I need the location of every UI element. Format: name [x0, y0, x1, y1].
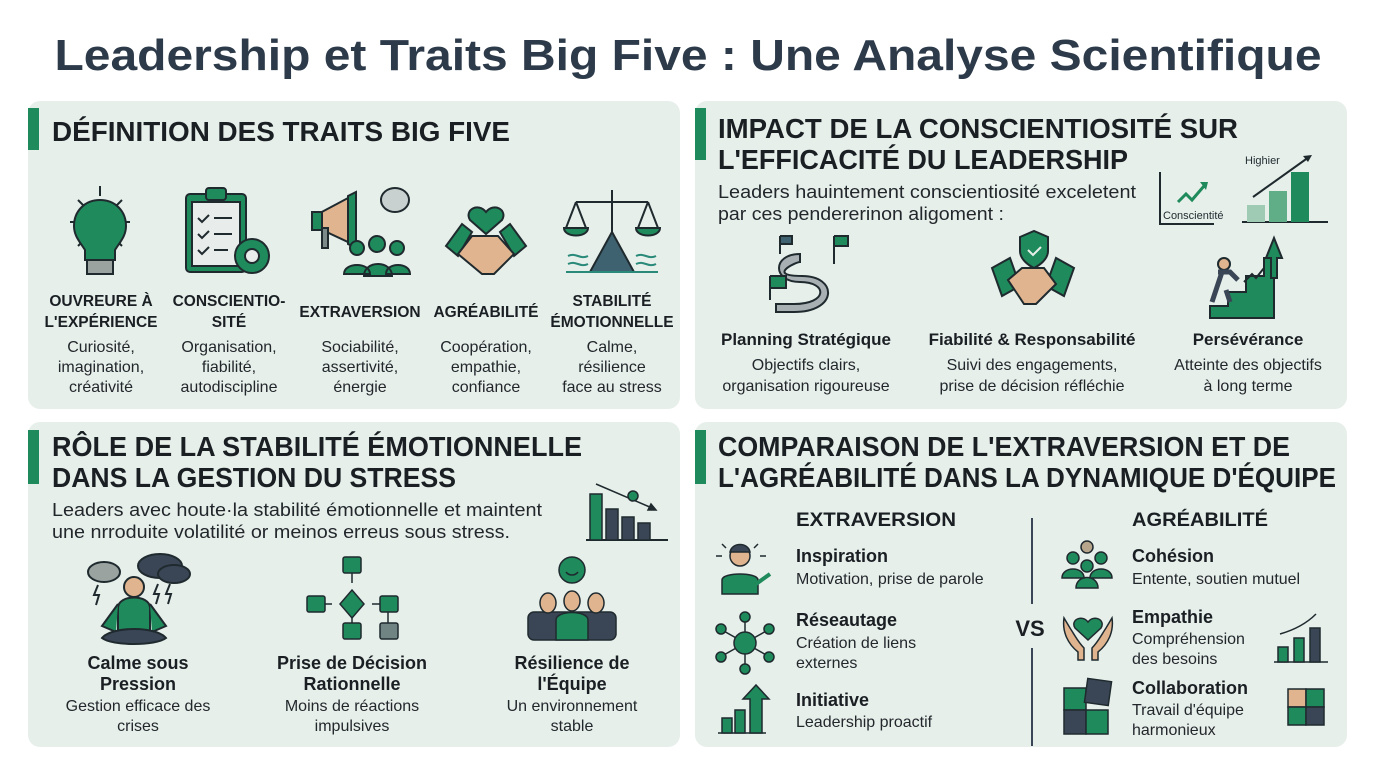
- agreabilite items: [1132, 546, 1300, 739]
- icon: puzzle: [1064, 678, 1112, 734]
- panel: comparaison: AGRÉABILITÉ: [1132, 509, 1268, 531]
- icon: initiative bars: [718, 685, 769, 733]
- trait labels: créativité: [69, 379, 133, 396]
- panel: conscientiosite: [695, 101, 1347, 409]
- panel: stabilite emotionnelle: DANS LA GESTION DU STRESS: [52, 462, 456, 493]
- agreabilite items: Cohésion: [1132, 546, 1214, 566]
- conscientiosite items: [721, 330, 1322, 395]
- conscientiosite items: Persévérance: [1193, 330, 1303, 349]
- trait labels: imagination,: [58, 359, 144, 376]
- trait labels: Calme,: [587, 339, 637, 356]
- trait labels: Coopération,: [440, 339, 532, 356]
- heading: stabilite: RÔLE DE LA STABILITÉ ÉMOTIONNELLE: [52, 430, 582, 462]
- panel: definition des traits: [28, 101, 680, 409]
- conscientiosite items: organisation rigoureuse: [722, 378, 890, 395]
- agreabilite items: Travail d'équipe: [1132, 702, 1244, 719]
- icon: handshake heart: [446, 207, 526, 274]
- stabilite items: Gestion efficace des: [66, 698, 210, 715]
- agreabilite items: Compréhension: [1132, 631, 1245, 648]
- conscientiosite items: Fiabilité & Responsabilité: [929, 330, 1135, 349]
- heading: comparaison: COMPARAISON DE L'EXTRAVERSION ET DE: [718, 431, 1290, 462]
- trait labels: confiance: [452, 379, 520, 396]
- trait labels: face au stress: [562, 379, 662, 396]
- icon: lightbulb: [70, 186, 130, 274]
- trait labels: L'EXPÉRIENCE: [44, 314, 158, 331]
- conscientiosite items: prise de décision réfléchie: [940, 378, 1125, 395]
- stabilite items: Résilience de: [514, 653, 630, 673]
- extraversion items: Création de liens: [796, 635, 916, 652]
- agreabilite items: Collaboration: [1132, 678, 1248, 698]
- trait labels: OUVREURE À: [49, 293, 153, 310]
- heading: conscientiosite: IMPACT DE LA CONSCIENTIOSITÉ SUR: [718, 113, 1238, 144]
- trait labels: CONSCIENTIO-: [173, 293, 285, 310]
- extraversion items: Réseautage: [796, 610, 897, 630]
- agreabilite items: des besoins: [1132, 651, 1217, 668]
- stabilite items: stable: [551, 718, 593, 735]
- chart: growth bars: [1274, 614, 1328, 662]
- stabilite items: Rationnelle: [303, 674, 401, 694]
- conscientiosite items: Objectifs clairs,: [752, 357, 860, 374]
- chart: conscientite: Highier: [1245, 155, 1280, 167]
- icon: cohesion group: [1062, 541, 1112, 588]
- panel: stabilite emotionnelle: [28, 422, 680, 747]
- divider vs: VS: [1015, 616, 1045, 641]
- trait labels: empathie,: [451, 359, 521, 376]
- panel: conscientiosite: L'EFFICACITÉ DU LEADERSHIP: [718, 144, 1128, 175]
- icon: stairs climber: [1210, 238, 1282, 318]
- stabilite items: crises: [117, 718, 159, 735]
- stabilite items: Moins de réactions: [285, 698, 419, 715]
- conscientiosite items: Planning Stratégique: [721, 330, 891, 349]
- stabilite items: Un environnement: [507, 698, 638, 715]
- intro text: Leaders avec houte·la stabilité émotionnelle et maintent: [52, 500, 542, 520]
- column headers: EXTRAVERSION: [796, 510, 956, 531]
- agreabilite items: Entente, soutien mutuel: [1132, 571, 1300, 588]
- conscientiosite items: à long terme: [1204, 378, 1293, 395]
- conscientiosite items: Suivi des engagements,: [947, 357, 1117, 374]
- icon: calm meditation: [88, 554, 190, 644]
- chart: conscientite: [1160, 155, 1328, 224]
- trait labels: ÉMOTIONNELLE: [550, 314, 674, 331]
- stabilite items: Pression: [100, 674, 176, 694]
- title: Leadership et Traits Big Five : Une Analyse Scientifique: [54, 31, 1322, 80]
- trait labels: Sociabilité,: [321, 339, 399, 356]
- stabilite items: [66, 653, 638, 735]
- extraversion items: [796, 546, 984, 731]
- extraversion items: Inspiration: [796, 546, 888, 566]
- icon: network: [716, 612, 774, 674]
- icon: speaker: [716, 544, 770, 594]
- panel: stabilite emotionnelle: une nrroduite volatilité or meinos erreus sous stress.: [52, 522, 510, 542]
- chart: declining bars: [586, 484, 668, 540]
- stabilite items: l'Équipe: [537, 673, 607, 694]
- agreabilite items: harmonieux: [1132, 722, 1216, 739]
- panel: conscientiosite: par ces pendererinon aligoment :: [718, 204, 1004, 224]
- extraversion items: Leadership proactif: [796, 714, 933, 731]
- agreabilite items: Empathie: [1132, 607, 1213, 627]
- extraversion items: externes: [796, 655, 857, 672]
- icon: team resilience: [528, 557, 616, 640]
- panel: comparaison: [695, 422, 1347, 747]
- trait labels: énergie: [333, 379, 387, 396]
- icon: puzzle square: [1288, 689, 1324, 725]
- icon: clipboard gear: [186, 188, 269, 273]
- stabilite items: Calme sous: [87, 653, 189, 673]
- trait labels: Curiosité,: [67, 339, 135, 356]
- intro text: Leaders hauintement conscientiosité exceletent: [718, 182, 1136, 202]
- chart: conscientite: Conscientité: [1163, 210, 1224, 222]
- trait labels: EXTRAVERSION: [299, 304, 421, 321]
- trait labels: SITÉ: [212, 314, 246, 331]
- conscientiosite items: Atteinte des objectifs: [1174, 357, 1322, 374]
- icon: road flags: [770, 236, 848, 312]
- panel: comparaison: L'AGRÉABILITÉ DANS LA DYNAMIQUE D'ÉQUIPE: [718, 462, 1336, 493]
- trait labels: STABILITÉ: [573, 293, 651, 310]
- icon: flowchart: [307, 557, 398, 639]
- trait labels: assertivité,: [322, 359, 398, 376]
- icon: empathy hands: [1064, 618, 1112, 660]
- trait labels: fiabilité,: [202, 359, 256, 376]
- trait labels: résilience: [578, 359, 646, 376]
- icon: megaphone people: [312, 188, 410, 276]
- trait labels: autodiscipline: [181, 379, 278, 396]
- extraversion items: Initiative: [796, 690, 869, 710]
- trait labels: Organisation,: [181, 339, 277, 356]
- extraversion items: Motivation, prise de parole: [796, 571, 984, 588]
- stabilite items: Prise de Décision: [277, 653, 427, 673]
- heading: definition: DÉFINITION DES TRAITS BIG FIVE: [52, 116, 510, 147]
- trait labels: [44, 293, 674, 396]
- icon: scale mountain: [564, 190, 660, 272]
- stabilite items: impulsives: [315, 718, 389, 735]
- trait labels: AGRÉABILITÉ: [433, 304, 539, 321]
- icon: shield handshake: [992, 231, 1074, 304]
